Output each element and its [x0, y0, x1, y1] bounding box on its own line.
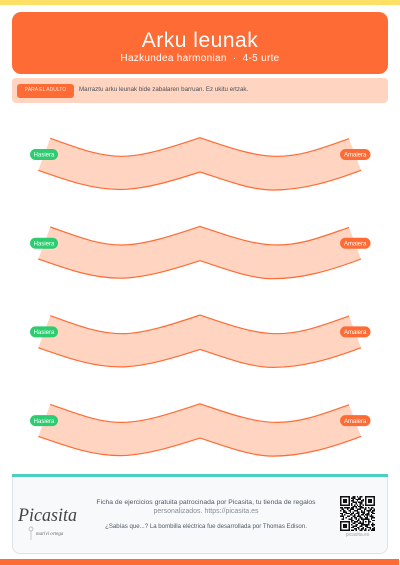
arc band 3: [30, 315, 370, 367]
arc band 2: Hasiera: [34, 241, 55, 247]
top yellow bar: [0, 0, 400, 5]
sponsor text: Ficha de ejercicios gratuita patrocinada por Picasita, tu tienda de regalos: [96, 499, 316, 506]
subtitle: Hazkundea harmonian · 4-5 urte: [120, 53, 280, 64]
logo: Picasita: Picasita: [17, 505, 77, 526]
logo: Picasita: mariví ortega: [36, 532, 64, 537]
arc band 1: Hasiera: [34, 153, 55, 159]
panel: header: [12, 12, 388, 74]
adult badge: [17, 84, 74, 98]
arc band 2: [30, 226, 370, 279]
arc band 2: Amaiera: [344, 241, 367, 247]
adult badge: PARA EL ADULTO: [25, 87, 66, 93]
arc band 4: Amaiera: [344, 419, 367, 425]
panel: instructions: [12, 78, 388, 103]
bottom orange bar: [0, 559, 399, 565]
arc band 3: Amaiera: [344, 330, 367, 336]
instruction text: Marraztu arku leunak bide zabalaren barruan. Ez ukitu ertzak.: [79, 86, 248, 93]
fun fact: ¿Sabías que...? La bombilla eléctrica fue desarrollada por Thomas Edison.: [105, 522, 307, 530]
arc band 1: Amaiera: [344, 153, 367, 159]
QR caption: picasita.es: [346, 532, 369, 538]
arc band 4: [30, 404, 370, 456]
footer teal strip: [12, 474, 388, 477]
sponsor link: personalizados. https://picasita.es: [153, 508, 259, 514]
arc band 4: Hasiera: [34, 419, 55, 425]
logo: Picasita: [17, 505, 77, 540]
QR code: [340, 496, 375, 531]
arc band 3: Hasiera: [34, 330, 55, 336]
arc band 1: [30, 138, 370, 190]
title: Arku leunak: [142, 29, 258, 52]
panel: footer: [12, 474, 388, 554]
